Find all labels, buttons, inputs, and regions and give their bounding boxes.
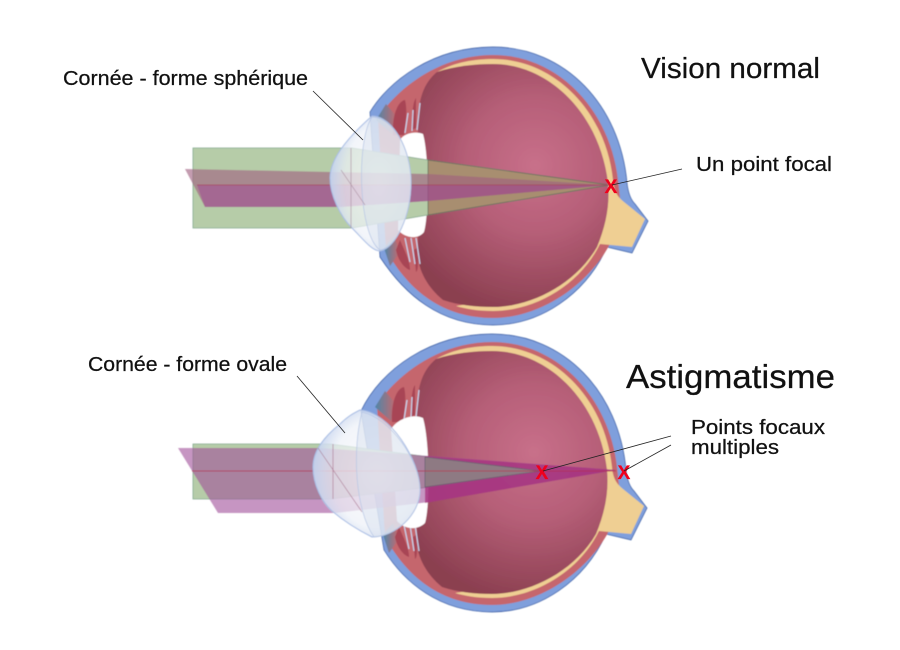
magenta lower beam	[197, 185, 610, 207]
leader line: single focal point	[612, 169, 682, 185]
refraction line	[318, 444, 362, 512]
cornea	[330, 116, 411, 251]
eye body: sclera	[370, 47, 648, 325]
pink beam centre line	[197, 184, 610, 186]
label: single focal point: Un point focal	[696, 154, 832, 176]
pink light beam	[178, 448, 616, 513]
eye: top, normal vision	[185, 47, 648, 325]
green light beam	[193, 444, 541, 499]
refraction line	[341, 148, 365, 228]
label: multiple focal points: multiples	[691, 437, 779, 459]
zonule fibres upper	[405, 103, 420, 133]
leader lines: multiple focal points	[543, 436, 671, 471]
cornea	[313, 410, 420, 537]
focal point marker: X	[605, 177, 618, 198]
pink light beam	[185, 169, 610, 207]
eye body: vitreous	[418, 64, 609, 307]
label: spherical cornea: Cornée - forme sphérique	[63, 68, 308, 90]
eye body	[361, 334, 647, 612]
pink beam centre line	[192, 470, 616, 472]
leader line: spherical cornea	[313, 91, 363, 140]
magenta lower beam inside the eye	[425, 470, 616, 503]
label: multiple focal points: Points focaux	[691, 417, 825, 439]
ciliary cavity upper	[393, 100, 406, 135]
focal point marker: first: X	[536, 463, 549, 484]
front of lens capsule	[362, 117, 411, 250]
label: oval cornea: Cornée - forme ovale	[88, 354, 287, 376]
leader line: oval cornea	[297, 376, 345, 433]
green beam inside the eye	[425, 457, 541, 487]
green light beam	[193, 148, 610, 228]
eye: bottom, astigmatism	[178, 334, 647, 612]
iris lower	[384, 236, 400, 266]
lens	[398, 133, 428, 237]
eye body: retina and optic nerve	[437, 59, 645, 311]
green beam inside the eye	[428, 160, 610, 215]
iris upper	[376, 104, 398, 134]
eye body: choroid	[378, 55, 620, 318]
ciliary cavity lower	[396, 240, 410, 270]
title: normal vision: Vision normal	[641, 53, 820, 85]
magenta upper beam inside the eye	[425, 456, 616, 471]
focal point marker: second: X	[618, 463, 631, 484]
front of lens capsule	[356, 412, 420, 537]
zonule fibres lower	[405, 238, 420, 264]
title: astigmatism: Astigmatisme	[626, 358, 835, 395]
